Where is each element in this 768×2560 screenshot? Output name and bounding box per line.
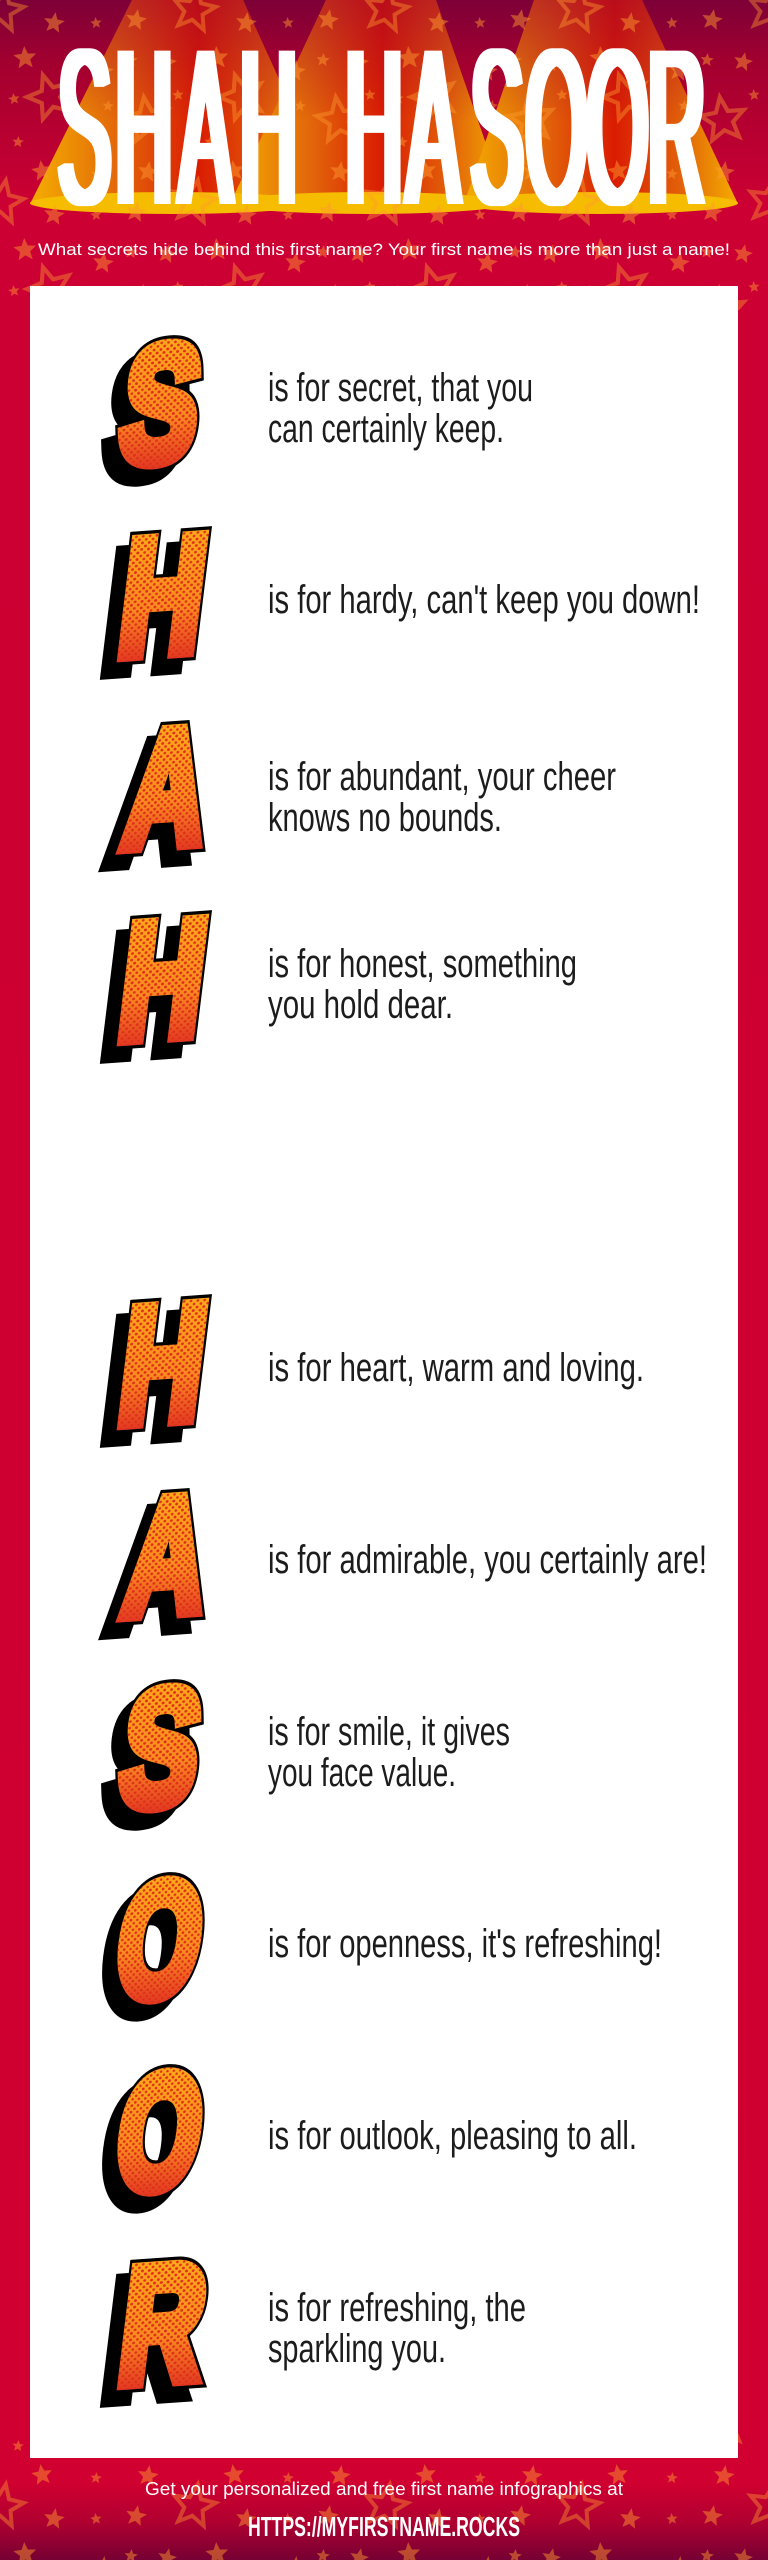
letter O: O	[108, 1848, 212, 2034]
letter A: A	[116, 693, 218, 882]
subtitle: What secrets hide behind this first name? Your first name is more than just a name!	[38, 240, 730, 259]
text: secret: can certainly keep.	[268, 407, 504, 451]
text: abundant	[268, 755, 616, 840]
letter R: R	[111, 2231, 215, 2419]
letter A: A	[102, 707, 204, 896]
text: honest: you hold dear.	[268, 983, 453, 1027]
text: refreshing	[268, 2286, 526, 2371]
letter A: A	[116, 1461, 218, 1650]
spotlights	[30, 0, 738, 214]
letter S: S	[98, 1669, 196, 1857]
text: refreshing: is for refreshing, the	[268, 2286, 526, 2330]
footer call to action: Get your personalized and free first name infographics at	[145, 2479, 623, 2499]
text: heart: is for heart, warm and loving.	[268, 1346, 644, 1390]
star pattern bottom	[0, 2432, 768, 2560]
letter A: A	[116, 1461, 218, 1650]
stage floor glow	[30, 192, 738, 214]
letter O: O	[108, 1848, 212, 2034]
footer url: HTTPS://MYFIRSTNAME.ROCKS	[248, 2511, 520, 2542]
letter R: R	[96, 2245, 201, 2433]
letter H: H	[111, 503, 215, 691]
letter H: H	[111, 1271, 215, 1459]
spotlight right	[464, 0, 738, 204]
letter R: R	[111, 2231, 215, 2419]
letter H: H	[111, 503, 215, 691]
text: abundant: is for abundant, your cheer	[268, 755, 616, 799]
letter H: H	[111, 503, 215, 691]
letter A: A	[116, 1461, 218, 1650]
panel: white content card	[30, 286, 738, 2458]
star pattern top	[0, 0, 768, 310]
text: abundant: knows no bounds.	[268, 796, 502, 840]
letter H: H	[111, 1271, 215, 1459]
text: secret: is for secret, that you	[268, 366, 533, 410]
text: honest	[268, 942, 577, 1027]
text: refreshing: sparkling you.	[268, 2327, 446, 2371]
letter H: H	[96, 1285, 201, 1473]
letter A: A	[102, 1475, 204, 1664]
text: smile: is for smile, it gives	[268, 1710, 510, 1754]
text: outlook: is for outlook, pleasing to all.	[268, 2114, 637, 2158]
letter O: O	[108, 2040, 212, 2226]
letter H: H	[111, 887, 215, 1075]
title: SHAH HASOOR	[58, 4, 705, 252]
letter H: H	[96, 901, 201, 1089]
letter O: O	[108, 2040, 212, 2226]
letter H: H	[111, 887, 215, 1075]
letter R: R	[111, 2231, 215, 2419]
letter A: A	[116, 693, 218, 882]
letter S: S	[98, 325, 196, 513]
letter S: S	[112, 1655, 210, 1843]
text: smile	[268, 1710, 510, 1795]
letter S: S	[112, 1655, 210, 1843]
letter H: H	[111, 887, 215, 1075]
text: secret	[268, 366, 533, 451]
letter O: O	[108, 1848, 212, 2034]
text: honest: is for honest, something	[268, 942, 577, 986]
letter S: S	[112, 311, 210, 499]
letter S: S	[112, 311, 210, 499]
letter H: H	[96, 517, 201, 705]
letter O: O	[94, 1862, 199, 2048]
text: smile: you face value.	[268, 1751, 456, 1795]
letter A: A	[116, 693, 218, 882]
spotlight left	[30, 0, 336, 204]
letter H: H	[111, 1271, 215, 1459]
letter S: S	[112, 311, 210, 499]
spotlight centre	[230, 0, 507, 204]
letter O: O	[94, 2054, 199, 2240]
letter S: S	[112, 1655, 210, 1843]
letter O: O	[108, 2040, 212, 2226]
